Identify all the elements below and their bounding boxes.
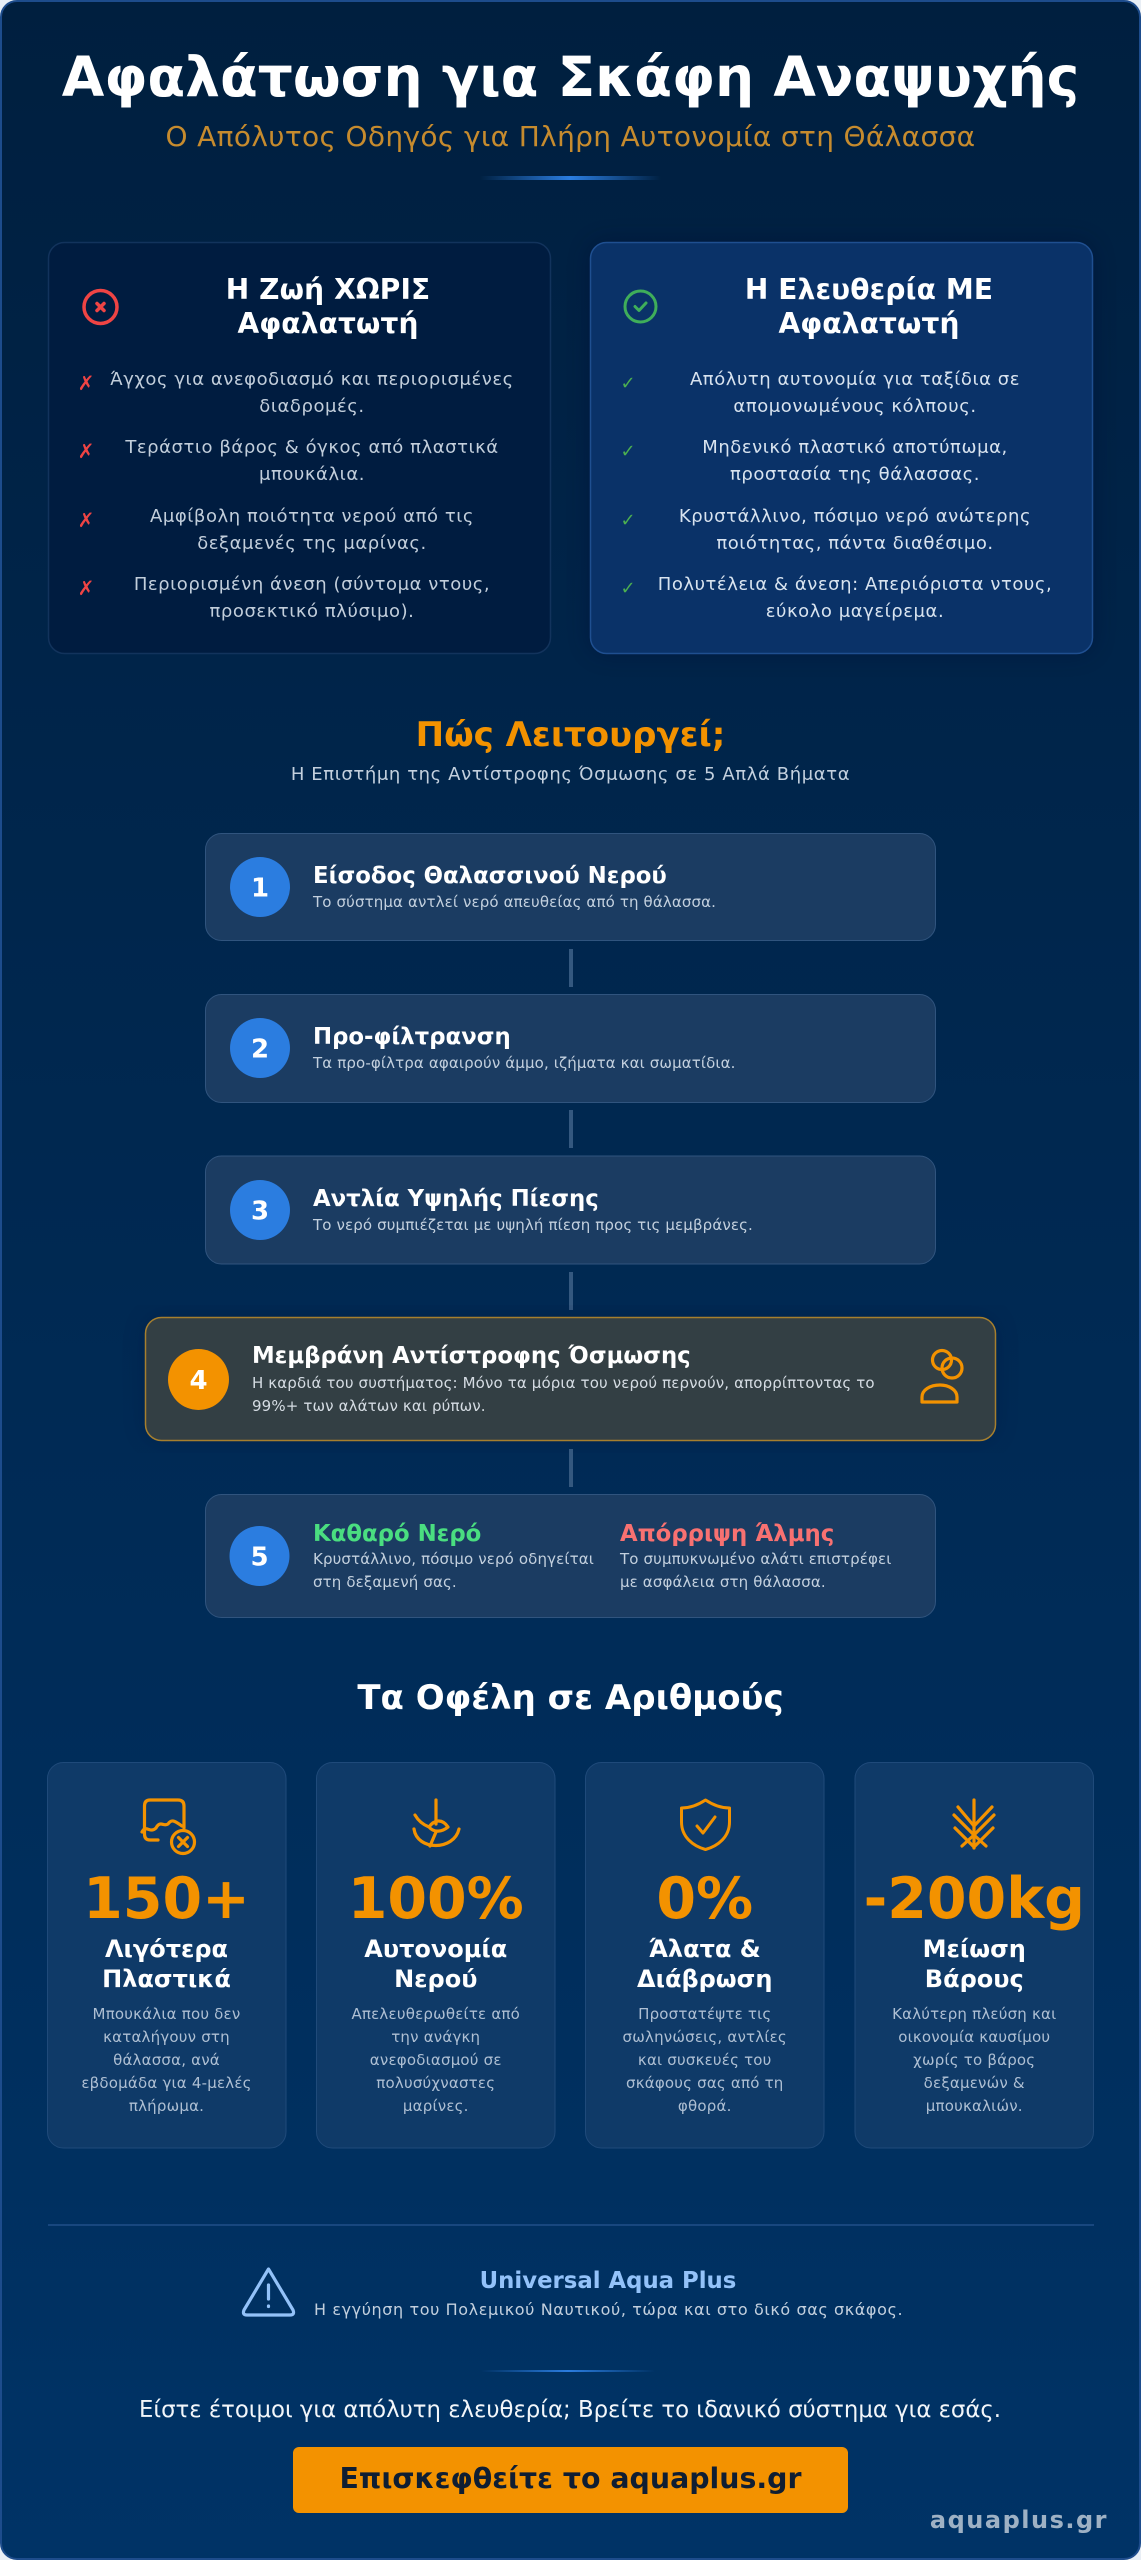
stat title: Πλαστικά — [102, 1965, 231, 1993]
icon: shield — [682, 1800, 730, 1850]
stat description: πλήρωμα. — [129, 2097, 204, 2115]
step number 3 — [230, 1180, 290, 1240]
stat description: σκάφους σας από τη — [626, 2074, 784, 2092]
step title: Αντλία Υψηλής Πίεσης — [313, 1186, 599, 1212]
stat description: θάλασσα, ανά — [113, 2051, 220, 2069]
step 1 — [206, 834, 936, 940]
step number 2 — [230, 1018, 290, 1078]
step title: Είσοδος Θαλασσινού Νερού — [313, 863, 667, 889]
stat title: Άλατα & — [649, 1935, 761, 1963]
list of benefits: Κρυστάλλινο, πόσιμο νερό ανώτερης — [679, 506, 1031, 527]
stat description: δεξαμενών & — [924, 2074, 1025, 2092]
clean water outcome: στη δεξαμενή σας. — [313, 1573, 457, 1591]
stat title: Μείωση — [923, 1935, 1026, 1963]
stat card: salts and corrosion — [586, 1762, 824, 2148]
connector — [569, 949, 573, 987]
stat description: σωληνώσεις, αντλίες — [623, 2028, 787, 2046]
list of drawbacks: ✗ — [78, 439, 94, 463]
icon: bottle crossed out — [142, 1800, 194, 1854]
list of drawbacks: προσεκτικό πλύσιμο). — [210, 601, 414, 622]
step description: Τα προ-φίλτρα αφαιρούν άμμο, ιζήματα και σωματίδια. — [312, 1054, 736, 1072]
connector — [569, 1272, 573, 1310]
icon: check in circle — [625, 291, 656, 322]
step number 3: 3 — [251, 1196, 269, 1226]
header — [62, 45, 1079, 180]
stat description: φθορά. — [678, 2097, 732, 2115]
title: Αφαλάτωση για Σκάφη Αναψυχής — [62, 45, 1079, 109]
panel heading: Η Ελευθερία ΜΕ — [745, 273, 993, 306]
step description: 99%+ των αλάτων και ρύπων. — [252, 1397, 486, 1415]
panel: freedom with a desalinator — [590, 242, 1092, 654]
list of benefits: ✓ — [620, 510, 636, 531]
stat description: καταλήγουν στη — [103, 2028, 230, 2046]
brand block — [243, 2268, 903, 2319]
stat number: 0% — [656, 1866, 753, 1932]
brand name: Universal Aqua Plus — [480, 2268, 736, 2294]
call to action text: Είστε έτοιμοι για απόλυτη ελευθερία; Βρείτε το ιδανικό σύστημα για εσάς. — [139, 2397, 1001, 2423]
clean water outcome: Κρυστάλλινο, πόσιμο νερό οδηγείται — [313, 1550, 594, 1568]
button — [293, 2447, 848, 2513]
stat description: μαρίνες. — [403, 2097, 469, 2115]
list of drawbacks: δεξαμενές της μαρίνας. — [197, 533, 427, 554]
section subheading: Η Επιστήμη της Αντίστροφης Όσμωσης σε 5 Απλά Βήματα — [291, 764, 850, 785]
stat description: Καλύτερη πλεύση και — [892, 2005, 1056, 2023]
brand tagline: Η εγγύηση του Πολεμικού Ναυτικού, τώρα και στο δικό σας σκάφος. — [314, 2300, 903, 2319]
list of drawbacks: Περιορισμένη άνεση (σύντομα ντους, — [134, 574, 490, 595]
stat title: Βάρους — [925, 1965, 1024, 1993]
clean water outcome — [313, 1521, 594, 1591]
stat description: ανεφοδιασμού σε — [370, 2051, 502, 2069]
list of drawbacks: Τεράστιο βάρος & όγκος από πλαστικά — [124, 437, 499, 458]
stat title: Αυτονομία — [364, 1935, 507, 1963]
list of drawbacks: ✗ — [78, 576, 94, 600]
step description: Το σύστημα αντλεί νερό απευθείας από τη θάλασσα. — [312, 893, 716, 911]
list of drawbacks: διαδρομές. — [259, 396, 365, 417]
list of drawbacks: ✗ — [78, 508, 94, 532]
stat description: μπουκαλιών. — [926, 2097, 1023, 2115]
stat description: Μπουκάλια που δεν — [93, 2005, 240, 2023]
step 3 — [206, 1156, 936, 1264]
step 5 — [206, 1494, 936, 1618]
connector — [569, 1110, 573, 1148]
stat description: Απελευθερωθείτε από — [351, 2005, 520, 2023]
panel heading: Η Ζωή ΧΩΡΙΣ — [226, 273, 430, 306]
stat number: -200kg — [864, 1866, 1085, 1932]
stat title: Νερού — [394, 1965, 477, 1993]
icon: membrane — [922, 1350, 962, 1402]
stat number: 100% — [348, 1866, 524, 1932]
stat description: πολυσύχναστες — [376, 2074, 495, 2092]
list of benefits: Μηδενικό πλαστικό αποτύπωμα, — [702, 437, 1008, 458]
list of benefits: εύκολο μαγείρεμα. — [766, 601, 944, 622]
step number 4: 4 — [189, 1366, 208, 1396]
stat number: 150+ — [83, 1866, 250, 1932]
step title: Προ-φίλτρανση — [313, 1024, 511, 1050]
list of benefits: ποιότητας, πάντα διαθέσιμο. — [716, 533, 994, 554]
stat card: autonomy — [316, 1762, 555, 2148]
step number 5 — [230, 1526, 290, 1586]
header divider — [480, 176, 661, 180]
list of drawbacks: Άγχος για ανεφοδιασμό και περιορισμένες — [110, 369, 514, 390]
stat title: Διάβρωση — [637, 1965, 772, 1993]
stat description: χωρίς το βάρος — [913, 2051, 1035, 2069]
brine outcome: Απόρριψη Άλμης — [620, 1521, 834, 1547]
stat description: και συσκευές του — [638, 2051, 772, 2069]
step number 2: 2 — [251, 1034, 269, 1064]
panel heading: Αφαλατωτή — [778, 307, 960, 340]
section heading: how it works: Πώς Λειτουργεί; — [416, 715, 725, 755]
step 4: highlighted — [146, 1318, 996, 1440]
icon: warning triangle — [243, 2269, 294, 2315]
list of benefits: ✓ — [620, 373, 636, 394]
step 2 — [206, 994, 936, 1102]
step number 5: 5 — [250, 1542, 269, 1572]
step description: Το νερό συμπιέζεται με υψηλή πίεση προς τις μεμβράνες. — [312, 1216, 753, 1234]
icon: weight reduction arrows — [954, 1800, 994, 1848]
stat description: οικονομία καυσίμου — [898, 2028, 1050, 2046]
step number 1 — [230, 857, 290, 917]
stat card: weight — [855, 1762, 1094, 2148]
website watermark: aquaplus.gr — [930, 2506, 1108, 2534]
list of benefits: απομονωμένους κόλπους. — [733, 396, 977, 417]
clean water outcome: Καθαρό Νερό — [313, 1521, 481, 1547]
stat description: εβδομάδα για 4-μελές — [81, 2074, 252, 2092]
list of benefits: Απόλυτη αυτονομία για ταξίδια σε — [690, 369, 1020, 390]
brine outcome — [619, 1521, 891, 1591]
step number 4 — [168, 1349, 229, 1410]
connector — [569, 1449, 573, 1487]
stat card: plastics — [48, 1762, 286, 2148]
icon: cross in circle — [84, 290, 117, 324]
icon: anchor — [414, 1800, 459, 1846]
stat description: Προστατέψτε τις — [638, 2005, 771, 2023]
subtitle: Ο Απόλυτος Οδηγός για Πλήρη Αυτονομία στη Θάλασσα — [166, 120, 975, 153]
panel heading: Αφαλατωτή — [237, 307, 419, 340]
list of benefits: προστασία της θάλασσας. — [730, 464, 980, 485]
list of drawbacks — [78, 369, 514, 622]
section heading: benefits: Τα Οφέλη σε Αριθμούς — [357, 1678, 784, 1718]
panel: life without a desalinator — [48, 242, 550, 654]
step title: Μεμβράνη Αντίστροφης Όσμωσης — [252, 1343, 691, 1369]
brine outcome: Το συμπυκνωμένο αλάτι επιστρέφει — [619, 1550, 891, 1568]
list of benefits: ✓ — [620, 578, 636, 599]
list of benefits: ✓ — [620, 441, 636, 462]
list of drawbacks: ✗ — [78, 371, 94, 395]
list of benefits — [620, 369, 1052, 622]
brine outcome: με ασφάλεια στη θάλασσα. — [620, 1573, 826, 1591]
list of drawbacks: μπουκάλια. — [259, 464, 365, 485]
step number 1: 1 — [251, 874, 269, 904]
list of benefits: Πολυτέλεια & άνεση: Απεριόριστα ντους, — [658, 574, 1052, 595]
button: Επισκεφθείτε το aquaplus.gr — [339, 2462, 802, 2495]
stat description: την ανάγκη — [391, 2028, 480, 2046]
step description: Η καρδιά του συστήματος: Μόνο τα μόρια του νερού περνούν, απορρίπτοντας το — [252, 1374, 875, 1392]
stat title: Λιγότερα — [105, 1935, 228, 1963]
list of drawbacks: Αμφίβολη ποιότητα νερού από τις — [150, 506, 474, 527]
